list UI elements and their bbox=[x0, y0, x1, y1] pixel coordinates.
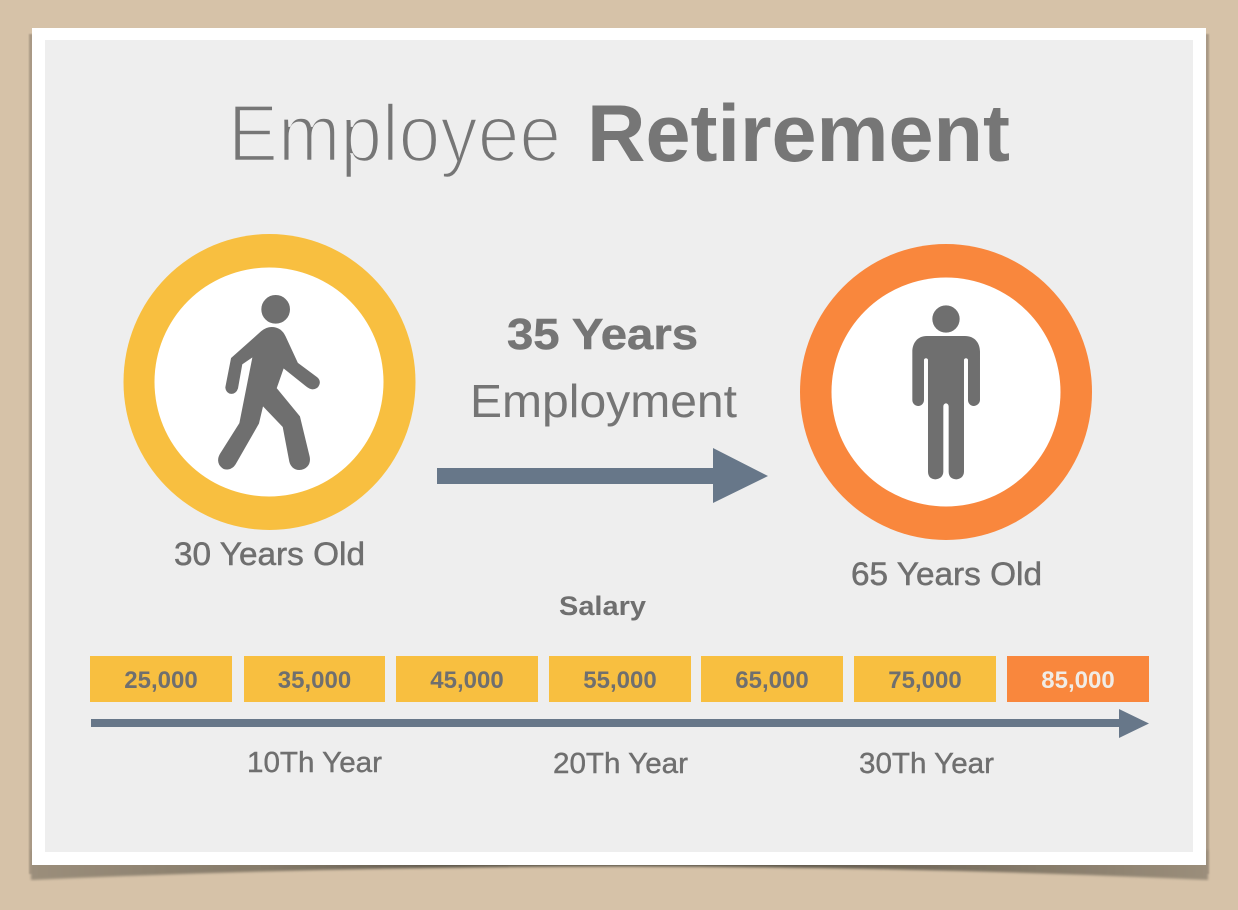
salary step 45,000: 45,000 bbox=[430, 667, 504, 694]
title: Employee bbox=[228, 89, 561, 179]
salary step 75,000 bbox=[854, 656, 996, 702]
label: 10th year: 10Th Year bbox=[247, 747, 382, 779]
heading: salary: Salary bbox=[559, 591, 646, 621]
salary step 55,000 bbox=[549, 656, 691, 702]
arrow: employment span bbox=[437, 448, 768, 503]
title bbox=[228, 89, 1010, 179]
salary step 25,000: 25,000 bbox=[124, 667, 198, 694]
label: 20th year: 20Th Year bbox=[553, 748, 688, 780]
salary step 65,000 bbox=[701, 656, 843, 702]
salary step 85,000 bbox=[1007, 656, 1149, 702]
yellow circle: age 30 bbox=[124, 234, 416, 530]
icon: walking person bbox=[219, 296, 319, 469]
salary bar bbox=[90, 656, 1149, 702]
salary step 55,000: 55,000 bbox=[583, 667, 657, 694]
title: Retirement bbox=[587, 89, 1010, 179]
label: employment: Employment bbox=[470, 375, 737, 427]
label: 30th year: 30Th Year bbox=[859, 748, 994, 780]
salary step 35,000: 35,000 bbox=[278, 667, 351, 694]
salary step 45,000 bbox=[396, 656, 538, 702]
salary step 25,000 bbox=[90, 656, 232, 702]
arrow: timeline bbox=[91, 709, 1149, 738]
salary step 85,000: 85,000 bbox=[1041, 667, 1115, 694]
label: 65 years old: 65 Years Old bbox=[851, 556, 1042, 592]
salary step 65,000: 65,000 bbox=[735, 667, 809, 694]
salary step 35,000 bbox=[244, 656, 385, 702]
label: 30 years old: 30 Years Old bbox=[174, 536, 365, 572]
orange circle: age 65 bbox=[800, 244, 1092, 540]
icon: standing person bbox=[912, 305, 980, 479]
heading: 35 years: 35 Years bbox=[507, 310, 698, 359]
salary step 75,000: 75,000 bbox=[888, 667, 962, 694]
